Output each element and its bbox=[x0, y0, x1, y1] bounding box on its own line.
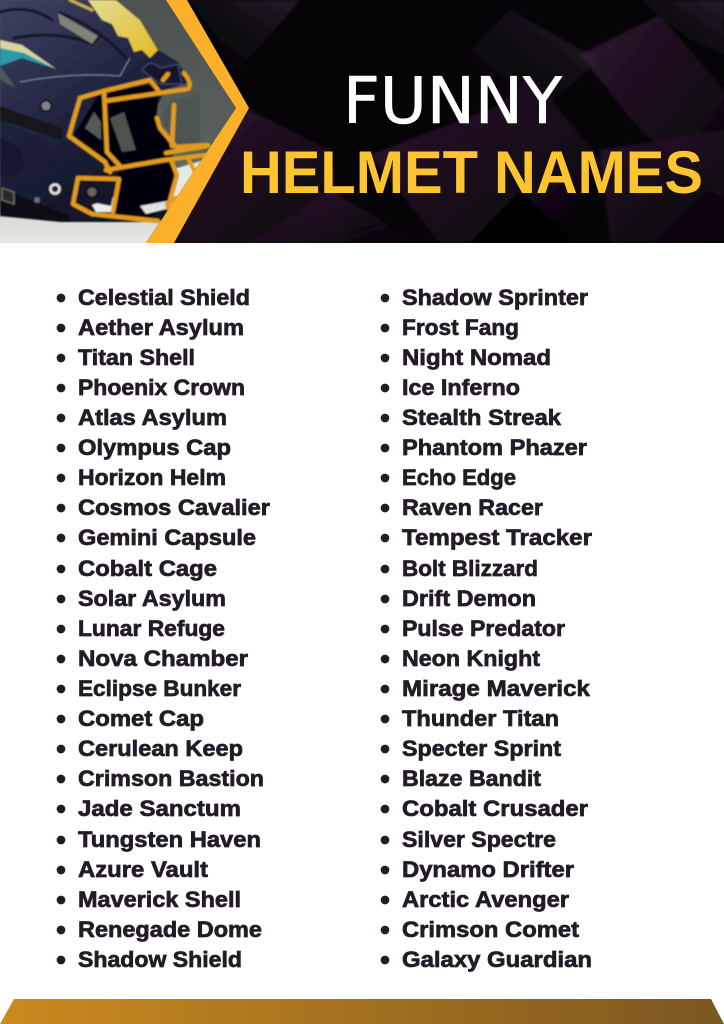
left name list: Atlas Asylum bbox=[78, 405, 227, 430]
yellow stripe bbox=[88, 0, 158, 58]
left name list: Renegade Dome bbox=[78, 917, 262, 942]
left name list: Cerulean Keep bbox=[78, 736, 243, 761]
left name list: Gemini Capsule bbox=[78, 525, 256, 550]
shell highlight line bbox=[20, 58, 130, 82]
icon: helmet bbox=[0, 0, 208, 222]
right name list: Frost Fang bbox=[402, 315, 519, 340]
right name list: Silver Spectre bbox=[402, 827, 556, 852]
right name list: Pulse Predator bbox=[402, 616, 565, 641]
title line: FUNNY: FUNNY bbox=[343, 65, 563, 139]
right name list: Dynamo Drifter bbox=[402, 857, 574, 882]
right name list: Blaze Bandit bbox=[402, 766, 542, 791]
left name list: Comet Cap bbox=[78, 706, 204, 731]
left name list: Nova Chamber bbox=[78, 646, 248, 671]
left name list: Celestial Shield bbox=[78, 285, 250, 310]
right name list: Phantom Phazer bbox=[402, 435, 587, 460]
jaw panels bbox=[0, 139, 24, 176]
left name list: Aether Asylum bbox=[78, 315, 244, 340]
chin strap bbox=[0, 106, 62, 140]
background geometric pattern bbox=[175, 0, 724, 243]
left name list: Phoenix Crown bbox=[78, 375, 245, 400]
right name list: Echo Edge bbox=[402, 465, 516, 490]
right name list: Galaxy Guardian bbox=[402, 947, 592, 972]
face mask interior bbox=[72, 84, 178, 218]
right name list: Night Nomad bbox=[402, 345, 551, 370]
ear bolt bbox=[40, 100, 52, 112]
right name list: Thunder Titan bbox=[402, 706, 559, 731]
left name list: Crimson Bastion bbox=[78, 766, 264, 791]
title line: HELMET NAMES: HELMET NAMES bbox=[240, 139, 703, 206]
footer gold bar bbox=[0, 999, 724, 1024]
left name list: Cobalt Cage bbox=[78, 556, 217, 581]
left name list: Titan Shell bbox=[78, 345, 195, 370]
title bbox=[240, 65, 703, 206]
left name list: Solar Asylum bbox=[78, 586, 226, 611]
jaw snap bbox=[50, 184, 60, 194]
right name list bbox=[381, 285, 592, 972]
left name list: Olympus Cap bbox=[78, 435, 231, 460]
right name list: Cobalt Crusader bbox=[402, 796, 588, 821]
right name list: Mirage Maverick bbox=[402, 676, 591, 701]
header banner bbox=[146, 0, 724, 243]
left name list: Lunar Refuge bbox=[78, 616, 225, 641]
gold chevron bbox=[146, 0, 249, 243]
left name list: Horizon Helm bbox=[78, 465, 226, 490]
left name list: Shadow Shield bbox=[78, 947, 242, 972]
right name list: Raven Racer bbox=[402, 495, 543, 520]
left name list: Cosmos Cavalier bbox=[78, 495, 270, 520]
right name list: Bolt Blizzard bbox=[402, 556, 538, 581]
right name list: Arctic Avenger bbox=[402, 887, 569, 912]
right name list: Tempest Tracker bbox=[402, 525, 592, 550]
shell grooves bbox=[0, 0, 128, 60]
helmet photo panel bbox=[0, 0, 236, 243]
right name list: Neon Knight bbox=[402, 646, 541, 671]
left name list: Jade Sanctum bbox=[78, 796, 241, 821]
right name list: Specter Sprint bbox=[402, 736, 562, 761]
gold cage bbox=[69, 73, 208, 221]
right name list: Drift Demon bbox=[402, 586, 536, 611]
left name list: Tungsten Haven bbox=[78, 827, 261, 852]
left name list bbox=[57, 285, 270, 972]
left name list: Maverick Shell bbox=[78, 887, 241, 912]
right name list: Shadow Sprinter bbox=[402, 285, 588, 310]
right name list: Crimson Comet bbox=[402, 917, 580, 942]
right name list: Stealth Streak bbox=[402, 405, 562, 430]
visor clip bbox=[142, 63, 182, 84]
left name list: Azure Vault bbox=[78, 857, 209, 882]
left name list: Eclipse Bunker bbox=[78, 676, 241, 701]
chin snap bbox=[86, 186, 114, 207]
side bolt decal bbox=[0, 48, 56, 70]
right name list: Ice Inferno bbox=[402, 375, 520, 400]
